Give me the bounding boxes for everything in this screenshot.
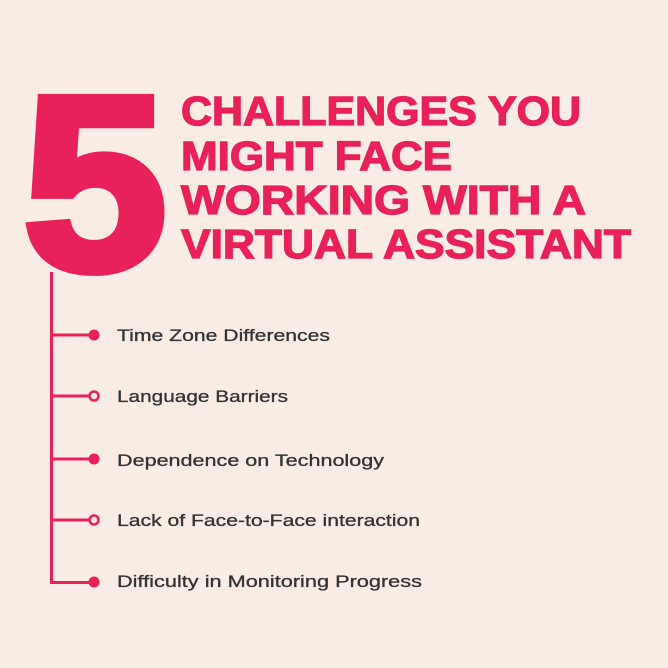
title: [181, 88, 631, 267]
item 2: Language Barriers: [117, 387, 288, 406]
title: WORKING WITH A: [181, 177, 586, 223]
timeline connector: [52, 272, 94, 582]
item 1: Time Zone Differences: [117, 326, 330, 345]
item 5: Difficulty in Monitoring Progress: [117, 572, 422, 591]
big number 5: 5: [23, 44, 167, 322]
item 3: Dependence on Technology: [117, 451, 385, 470]
title: VIRTUAL ASSISTANT: [181, 221, 631, 267]
title: CHALLENGES YOU: [181, 88, 581, 134]
title: MIGHT FACE: [181, 133, 452, 179]
item 4: Lack of Face-to-Face interaction: [117, 511, 420, 530]
